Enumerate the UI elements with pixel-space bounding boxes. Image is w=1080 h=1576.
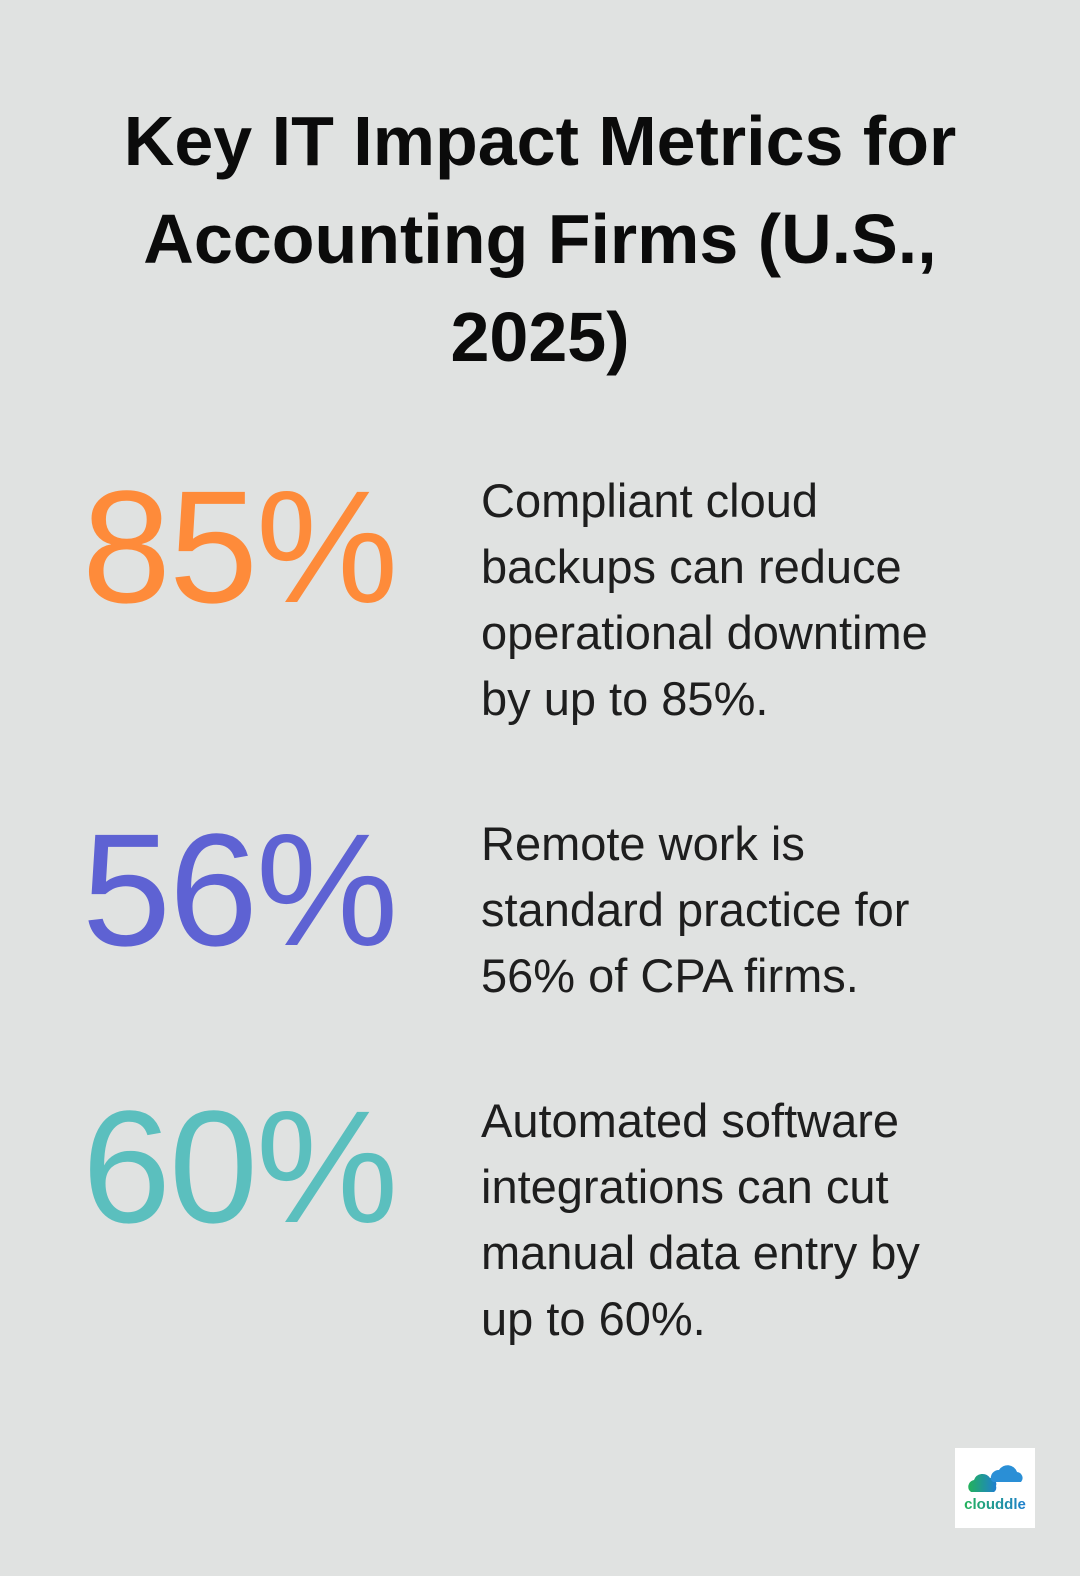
text 60%: Automated software integrations can cut manual data entry by up to 60%. <box>481 1094 920 1345</box>
logo: clouddle <box>964 1496 1026 1513</box>
stat 85%: 85% <box>82 457 396 636</box>
text 85%: Compliant cloud backups can reduce operational downtime by up to 85%. <box>481 474 928 725</box>
logo <box>955 1448 1035 1528</box>
stat 56%: 56% <box>82 800 396 979</box>
title: Key IT Impact Metrics for Accounting Firms (U.S., 2025) <box>124 102 956 376</box>
text 56%: Remote work is standard practice for 56% of CPA firms. <box>481 817 909 1002</box>
stat 60%: 60% <box>82 1077 396 1256</box>
